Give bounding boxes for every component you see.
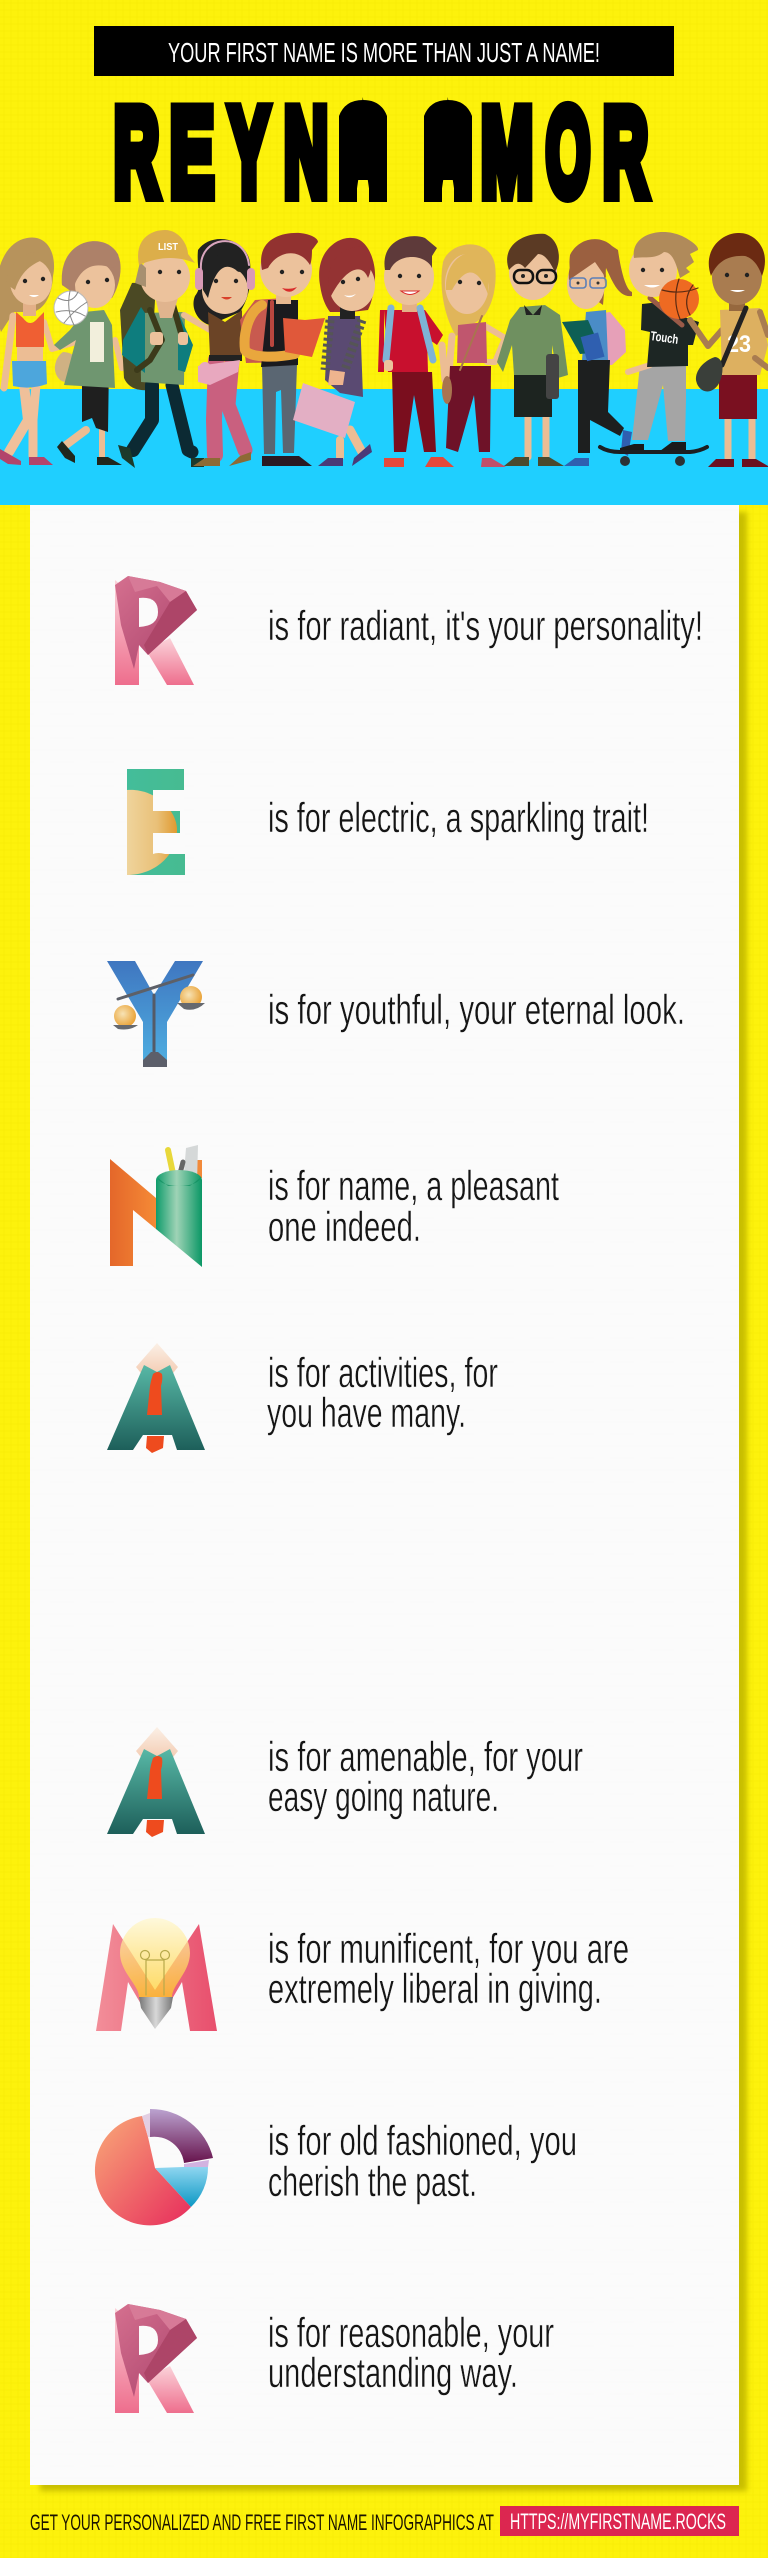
person 8: blond girl with magenta pants: [441, 244, 506, 467]
text: A is for amenable: is for amenable, for your: [268, 1733, 583, 1780]
person 9: boy with glasses and green sweater: [497, 234, 568, 466]
title: name: N: [284, 84, 328, 222]
text: O is for old fashioned: cherish the past.: [268, 2158, 477, 2205]
cyan ground band: [0, 389, 768, 505]
title: name: R: [603, 84, 648, 222]
text: M is for munificent: [268, 1925, 629, 2012]
text: R is for reasonable: understanding way.: [268, 2349, 518, 2396]
title: name: E: [170, 84, 214, 222]
text: M is for munificent: extremely liberal in giving.: [268, 1965, 602, 2012]
person 6: girl with purple dress and pink bag: [293, 238, 375, 466]
text: A is for activities: you have many.: [267, 1389, 466, 1436]
icon: letter A with tie: [107, 1343, 205, 1453]
person 5: boy with red book: [240, 233, 325, 466]
icon: letter O pie chart: [95, 2109, 213, 2225]
text: O is for old fashioned: [268, 2117, 577, 2205]
title: name: A: [429, 84, 467, 222]
icon: second letter R diamond: [115, 2304, 197, 2413]
title: name: M: [481, 84, 533, 222]
icon: second letter A with tie: [107, 1727, 205, 1837]
person 1: girl in orange top: [0, 238, 76, 465]
title: name: A: [344, 84, 382, 222]
text: N is for name: [268, 1162, 559, 1250]
person 2: green jacket with volleyball: [54, 241, 122, 465]
text: A is for amenable: easy going nature.: [268, 1773, 499, 1820]
text: R is for reasonable: is for reasonable, your: [268, 2309, 554, 2356]
icon: letter R diamond: [115, 576, 197, 685]
text: A is for activities: [267, 1349, 498, 1436]
person 11: skateboarder with basketball: [600, 232, 722, 466]
text: A is for amenable: [268, 1733, 583, 1820]
person 4: girl with headphones and pink pants: [184, 239, 255, 466]
person 3: hiker with backpack and cap: [118, 230, 204, 468]
white content panel: [30, 505, 739, 2485]
title: name: O: [546, 84, 590, 222]
footer call to action: GET YOUR PERSONALIZED AND FREE FIRST NAME INFOGRAPHICS AT: [30, 2510, 494, 2535]
text: A is for activities: is for activities, for: [268, 1349, 498, 1396]
text: R is for reasonable: [268, 2309, 554, 2396]
icon: letter E with potato: [127, 769, 185, 875]
text: O is for old fashioned: is for old fashioned, you: [268, 2117, 577, 2164]
tagline banner: [94, 26, 674, 76]
person 12: boy in yellow tank top: [696, 233, 768, 467]
person 7: boy in red shirt: [378, 236, 454, 467]
group of people illustration: [0, 230, 768, 468]
icon: letter Y with scales: [107, 961, 205, 1067]
person 3: hiker with backpack and cap: LIST: [158, 242, 178, 253]
icon: letter N with pencil cup: [110, 1145, 202, 1267]
panel shadow: [40, 512, 747, 2491]
text: N is for name: is for name, a pleasant: [268, 1162, 559, 1209]
person 11: skateboarder with basketball: Touch: [650, 328, 679, 347]
person 10: ponytail girl with tablet: [562, 239, 632, 466]
text: N is for name: one indeed.: [268, 1203, 421, 1250]
person 12: boy in yellow tank top: 23: [727, 331, 751, 358]
title: name: [114, 84, 648, 222]
title: name: Y: [229, 84, 269, 222]
icon: letter M with light bulb: [96, 1918, 217, 2031]
title: name: R: [114, 84, 159, 222]
